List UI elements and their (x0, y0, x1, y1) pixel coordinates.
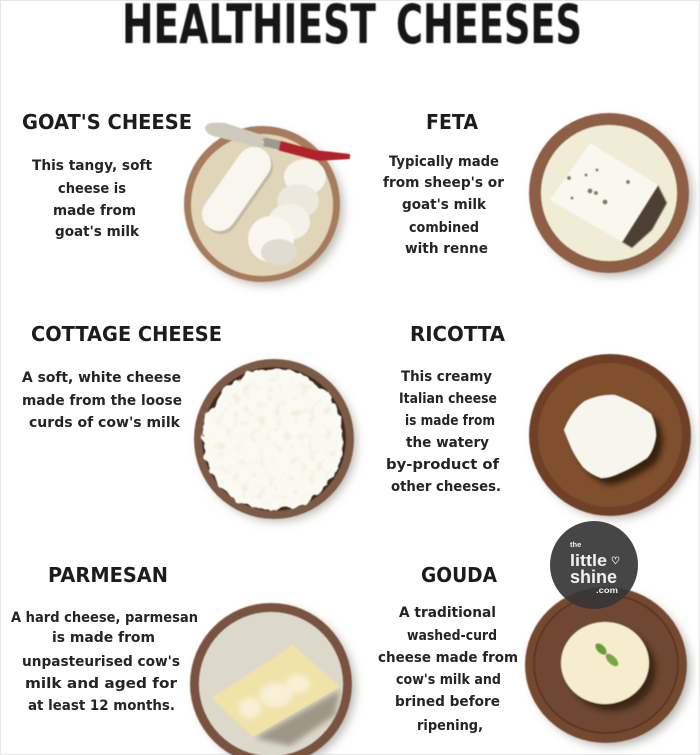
text: goat's cheese description: goat's milk (55, 224, 139, 240)
text: ricotta description: the watery (406, 435, 490, 451)
panel: goat's cheese (22, 110, 350, 285)
text: cottage cheese description: made from the loose (22, 393, 182, 409)
text: parmesan description: is made from (52, 630, 155, 646)
logo badge: shine (570, 567, 617, 587)
text: parmesan description: milk and aged for (25, 676, 178, 692)
text: feta description: combined (409, 220, 479, 236)
text: feta description: from sheep's or (383, 175, 505, 191)
icon: feta plate (529, 113, 692, 276)
panel: parmesan (11, 563, 355, 755)
text: ricotta description: by-product of (386, 457, 500, 473)
logo badge: .com (596, 586, 618, 595)
text: cottage cheese description (22, 370, 182, 431)
icon: ricotta bowl (529, 354, 692, 518)
logo badge: the (570, 540, 581, 549)
icon: parmesan plate (190, 603, 355, 755)
logo badge (550, 521, 638, 609)
text: feta description: goat's milk (402, 197, 486, 213)
heading: ricotta: RICOTTA (410, 322, 506, 346)
heading: goat's cheese: GOAT'S CHEESE (22, 110, 192, 134)
text: parmesan description: unpasteurised cow's (22, 654, 180, 670)
text: ricotta description: This creamy (401, 369, 492, 385)
text: parmesan description: at least 12 months. (28, 698, 175, 714)
icon: cottage cheese bowl (194, 359, 356, 521)
text: feta description: Typically made (389, 154, 499, 170)
text: feta description: with renne (405, 241, 488, 257)
icon: goat's cheese plate (184, 122, 350, 285)
text: gouda description: A traditional (399, 605, 496, 621)
text: ricotta description: Italian cheese (399, 391, 497, 407)
text: goat's cheese description: cheese is (58, 181, 126, 197)
text: parmesan description (11, 610, 198, 714)
panel: cottage cheese (22, 322, 356, 521)
text: cottage cheese description: A soft, white cheese (22, 370, 181, 386)
text: gouda description: brined before (395, 694, 500, 710)
logo badge: little (570, 551, 607, 570)
panel: ricotta (386, 322, 692, 518)
text: goat's cheese description (32, 158, 152, 240)
panel: feta (383, 110, 692, 276)
text: feta description (383, 154, 505, 257)
text: ricotta description: is made from (405, 413, 495, 429)
text: parmesan description: A hard cheese, parmesan (11, 610, 198, 626)
text: goat's cheese description: made from (53, 203, 136, 219)
heading: parmesan: PARMESAN (48, 563, 168, 587)
heading: feta: FETA (426, 110, 478, 134)
text: gouda description: washed-curd (407, 628, 497, 644)
logo badge: ♡ (611, 556, 620, 567)
text: gouda description: ripening, (417, 718, 483, 734)
text: cottage cheese description: curds of cow's milk (29, 415, 180, 431)
text: ricotta description (386, 369, 501, 495)
heading: cottage cheese: COTTAGE CHEESE (31, 322, 222, 346)
text: goat's cheese description: This tangy, soft (32, 158, 152, 174)
text: gouda description: cow's milk and (396, 672, 501, 688)
text: gouda description: cheese made from (378, 650, 518, 666)
text: gouda description (378, 605, 518, 734)
icon: gouda board (525, 587, 690, 746)
text: ricotta description: other cheeses. (391, 479, 501, 495)
heading: gouda: GOUDA (421, 563, 497, 587)
panel: gouda (378, 563, 690, 746)
